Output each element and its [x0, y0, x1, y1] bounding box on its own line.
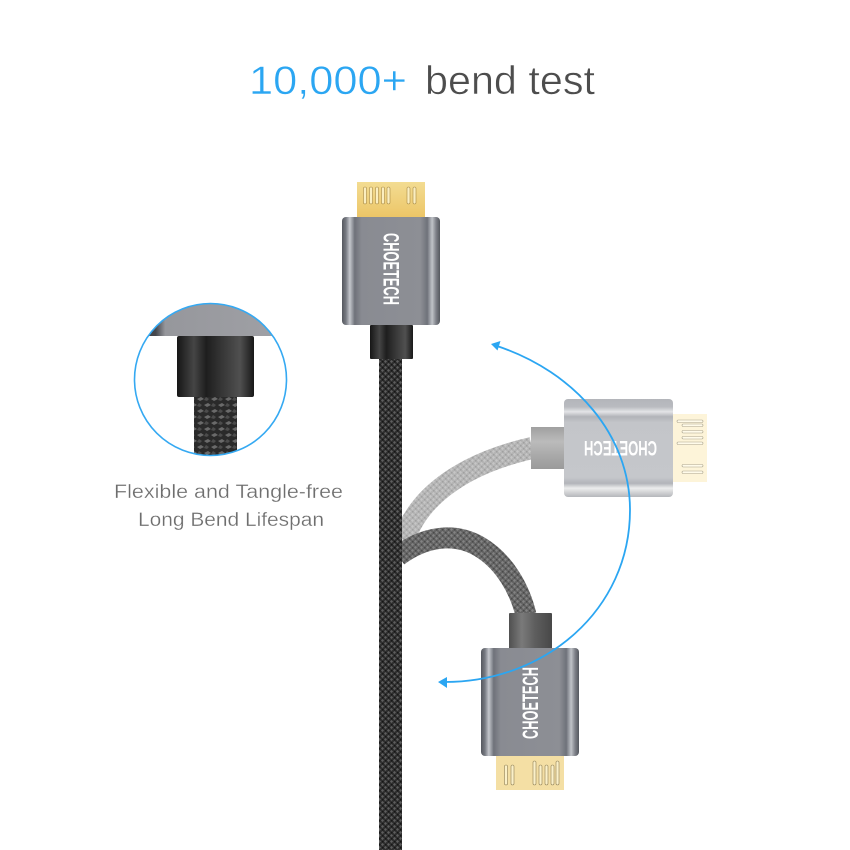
black ferrule	[370, 325, 413, 359]
brand text: CHOETECH	[378, 233, 404, 305]
caption: Long Bend Lifespan	[138, 510, 324, 531]
light connector, bent position	[531, 399, 707, 497]
title	[249, 59, 595, 103]
grey ferrule	[509, 613, 552, 649]
dark brand text: CHOETECH	[518, 667, 543, 739]
light housing	[564, 399, 673, 497]
dark bent cable	[398, 538, 526, 615]
caption: Flexible and Tangle-free	[114, 482, 343, 503]
arrow: bend arc	[438, 341, 630, 688]
inset detail circle	[130, 300, 290, 458]
gold tip	[357, 182, 425, 218]
light bent cable	[404, 448, 532, 540]
dark connector, bent position	[481, 613, 579, 790]
light brand text: CHOETECH	[584, 436, 657, 459]
caption	[114, 482, 343, 531]
title: 10,000+	[249, 59, 407, 103]
main vertical cable	[379, 356, 402, 850]
top connector	[342, 182, 440, 359]
metal housing	[342, 217, 440, 325]
light ferrule	[531, 427, 565, 469]
grey housing	[481, 648, 579, 756]
title: bend test	[425, 59, 595, 103]
mid gold tip	[496, 755, 564, 790]
light gold tip	[673, 414, 707, 482]
